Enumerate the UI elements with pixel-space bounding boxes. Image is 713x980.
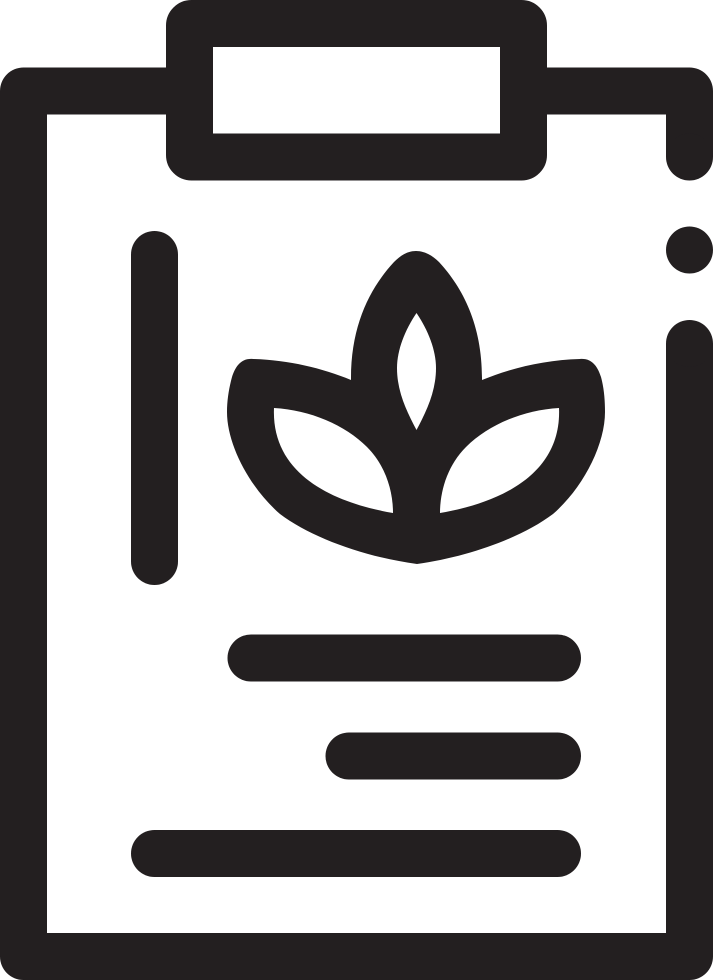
text line 3 bbox=[154, 830, 558, 877]
centre leaf cut-out bbox=[397, 313, 436, 430]
text line 1 bbox=[251, 634, 558, 682]
left leaf cut-out bbox=[274, 408, 393, 513]
clipboard clip bbox=[190, 24, 524, 157]
right leaf cut-out bbox=[440, 408, 559, 513]
leaves silhouette bbox=[227, 251, 605, 564]
dot bbox=[666, 226, 713, 274]
text line 2 bbox=[349, 732, 558, 780]
icon: leaves bbox=[227, 251, 605, 564]
vertical text line bbox=[131, 254, 178, 562]
